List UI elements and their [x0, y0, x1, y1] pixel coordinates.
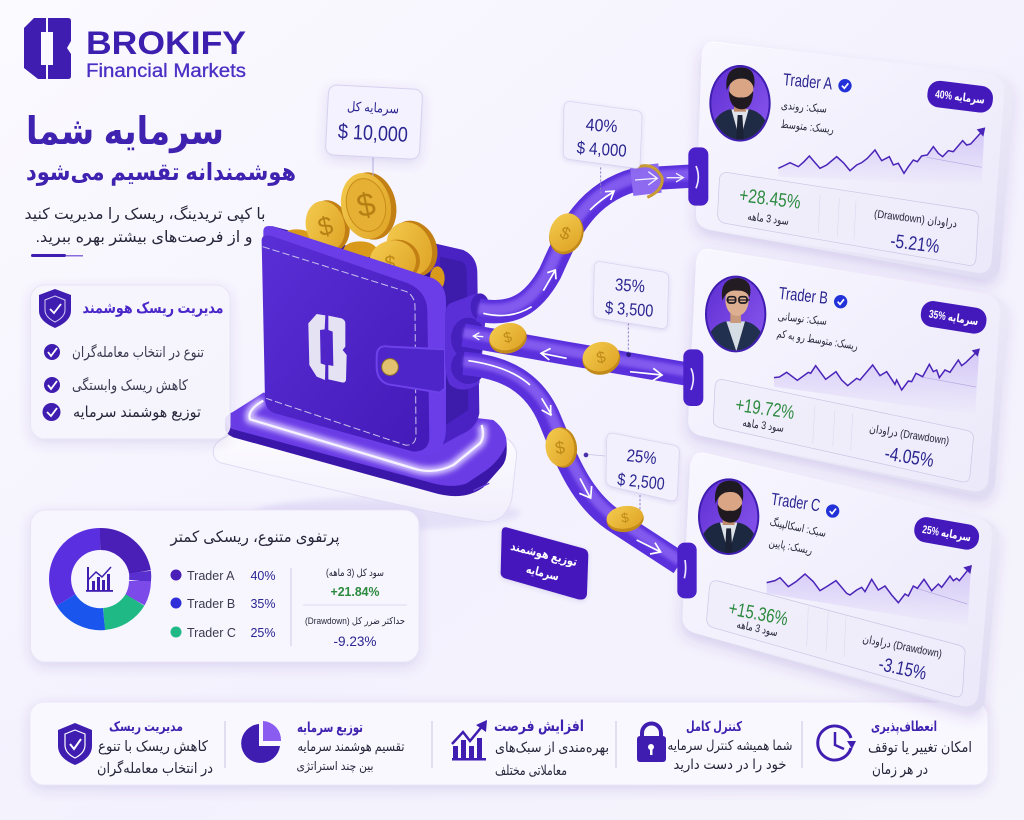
panel: Trader C card: [683, 453, 999, 711]
stats box: [707, 581, 965, 697]
coins on pipes: [486, 208, 645, 534]
clasp strap: [377, 346, 445, 393]
legend: Trader C: Trader C: [187, 626, 236, 640]
panel heading: پرتفوی متنوع، ریسکی کمتر: [170, 529, 340, 547]
list item: diversity: تنوع در انتخاب معامله‌گران: [72, 344, 204, 361]
feature: flexibility: [818, 719, 972, 778]
summary: total profit: [326, 568, 384, 599]
legend: Trader B: [170, 597, 276, 611]
allocation pill: [912, 515, 981, 552]
icon: clock: [818, 726, 856, 760]
donut chart: [60, 539, 140, 619]
icon: verified badge: [834, 295, 847, 308]
icon: verified badge: [838, 79, 852, 92]
callout: total capital: $ 10,000: [337, 120, 408, 147]
callout: 40% allocation: $ 4,000: [576, 137, 627, 161]
legend: Trader A: [170, 569, 276, 583]
profit value: +19.72%: [734, 395, 796, 424]
trader style: سبک: روندی: [781, 100, 827, 116]
profit label: سود 3 ماهه: [747, 211, 790, 228]
avatar: Trader C: [697, 478, 760, 555]
feature: capital allocation: توزیع سرمایه: [297, 719, 363, 736]
legend: Trader B: 35%: [250, 597, 276, 611]
feature: capital allocation: بین چند استراتژی: [296, 759, 374, 774]
trader risk: ریسک: متوسط: [780, 119, 834, 136]
logo tagline: Financial Markets: [86, 61, 246, 82]
callout: 25% allocation: [583, 433, 679, 510]
trader risk: ریسک: متوسط رو به کم: [776, 328, 859, 353]
icon: chart in donut: [86, 567, 113, 592]
accent line: [31, 254, 83, 257]
summary: max drawdown: -9.23%: [334, 633, 376, 649]
feature: capital allocation: تقسیم هوشمند سرمایه: [298, 739, 405, 755]
platform: [213, 393, 520, 530]
callout: 40% allocation: [563, 102, 642, 193]
allocation pill: سرمایه ‎25%: [921, 524, 972, 544]
feature: full control: [637, 719, 792, 773]
callout: 35% allocation: 35%: [614, 274, 646, 296]
panel: smart risk management: [30, 285, 230, 439]
drawdown value: -5.21%: [889, 231, 941, 258]
stats box: [713, 379, 973, 482]
feature: more opportunity: [452, 718, 609, 778]
allocation pill: سرمایه ‎35%: [928, 308, 979, 328]
trader style: سبک: نوسانی: [777, 311, 827, 328]
line chart: [767, 565, 972, 627]
legend: Trader B: Trader B: [187, 597, 235, 611]
coins on pipes: $: [554, 437, 566, 458]
flow pipes: [445, 102, 708, 600]
icon: logo mark: [24, 18, 71, 79]
legend: Trader A: 40%: [250, 569, 276, 583]
list item: lower risk: کاهش ریسک وابستگی: [72, 377, 188, 394]
wallet logo: [308, 314, 347, 383]
coins in wallet: $: [384, 253, 396, 275]
connector block: [445, 293, 489, 390]
trader name: Trader B: [778, 283, 829, 308]
allocation pill: [919, 299, 988, 335]
callout: 35% allocation: $ 3,500: [604, 297, 654, 321]
panel: portfolio: [30, 510, 419, 662]
wallet on platform: [213, 167, 520, 530]
trader name: Trader C: [770, 489, 822, 515]
feature: risk management: [58, 719, 213, 777]
panel: bottom feature bar: [30, 702, 988, 785]
intro text: [24, 205, 266, 247]
legend: Trader C: 25%: [250, 626, 276, 640]
feature: full control: شما همیشه کنترل سرمایه: [668, 738, 792, 754]
coins in wallet: $: [353, 185, 379, 224]
feature: risk management: مدیریت ریسک: [109, 719, 183, 734]
profit label: سود 3 ماهه: [736, 619, 779, 639]
inner opening: [272, 226, 445, 317]
logo name: BROKIFY: [86, 25, 246, 61]
feature: risk management: در انتخاب معامله‌گران: [97, 760, 213, 777]
drawdown label: دراودان (Drawdown): [873, 208, 958, 230]
tab connectors: [677, 147, 708, 598]
wallet back panel: [420, 240, 479, 453]
coins on pipes: $: [502, 330, 514, 347]
avatar: Trader A: [708, 65, 772, 142]
profit value: +15.36%: [727, 598, 790, 631]
coins in wallet: [282, 167, 446, 290]
legend: Trader C: [170, 626, 276, 640]
coins on pipes: $: [620, 510, 630, 526]
trader risk: ریسک: پایین: [768, 537, 813, 557]
title: سرمایه شما: [26, 111, 224, 153]
profit value: +28.45%: [738, 185, 802, 214]
drawdown label: دراودان (Drawdown): [868, 423, 950, 448]
avatar: Trader B: [704, 276, 767, 352]
callout: 40% allocation: 40%: [585, 114, 618, 136]
summary: max drawdown: [305, 616, 405, 649]
feature: more opportunity: افزایش فرصت: [494, 718, 584, 735]
icon: verified badge: [826, 504, 839, 518]
drawdown value: -3.15%: [877, 654, 928, 685]
feature: full control: کنترل کامل: [686, 719, 742, 734]
callout: 35% allocation: [593, 262, 669, 357]
list item: diversity: [44, 344, 204, 361]
intro text: با کپی تریدینگ، ریسک را مدیریت کنید: [24, 205, 266, 224]
drawdown value: -4.05%: [883, 444, 935, 472]
pipe: top to Trader A: [478, 166, 693, 316]
icon: pie chart: [241, 721, 281, 763]
summary: total profit: +21.84%: [330, 584, 380, 599]
trader style: سبک: اسکالپینگ: [769, 515, 827, 540]
panel: Trader B card: [688, 249, 1008, 496]
callout: total capital: [325, 85, 423, 176]
list item: smart allocation: توزیع هوشمند سرمایه: [73, 404, 201, 421]
drawdown label: دراودان (Drawdown): [861, 633, 943, 661]
icon: padlock: [637, 724, 666, 762]
pipe: bottom to Trader C: [463, 361, 680, 563]
line chart: [774, 348, 980, 415]
trader name: Trader A: [782, 69, 833, 93]
feature: more opportunity: معاملاتی مختلف: [495, 762, 567, 778]
legend: Trader A: Trader A: [187, 569, 235, 583]
feature: flexibility: در هر زمان: [872, 762, 928, 778]
allocation pill: [926, 79, 994, 114]
allocation pill: سرمایه ‎40%: [934, 89, 985, 107]
feature: flexibility: امکان تغییر یا توقف: [868, 740, 972, 756]
stats box: [718, 173, 978, 266]
pipe: middle to Trader B: [463, 333, 687, 381]
subtitle: هوشمندانه تقسیم می‌شود: [26, 159, 296, 186]
coins on pipes: $: [557, 222, 574, 244]
coins in wallet: $: [315, 210, 337, 242]
icon: shield: [58, 723, 92, 765]
callout: smart distribution: سرمایه: [525, 562, 561, 583]
feature: flexibility: انعطاف‌پذیری: [871, 719, 937, 734]
feature: capital allocation: [241, 719, 405, 774]
callout: total capital: سرمایه کل: [347, 99, 399, 117]
feature: more opportunity: بهره‌مندی از سبک‌های: [495, 739, 609, 756]
callout: smart distribution: توزیع هوشمند: [509, 539, 579, 570]
summary: total profit: سود کل (3 ماهه): [326, 568, 384, 579]
callout: 25% allocation: $ 2,500: [616, 469, 666, 494]
icon: shield: [39, 289, 71, 328]
profit label: سود 3 ماهه: [742, 417, 785, 435]
callout: 25% allocation: 25%: [626, 445, 658, 468]
list item: lower risk: [44, 377, 188, 394]
feature: full control: خود را در دست دارید: [674, 756, 786, 773]
feature: risk management: کاهش ریسک با تنوع: [98, 739, 208, 755]
logo: Brokify: [24, 18, 246, 82]
intro text: و از فرصت‌های بیشتر بهره ببرید.: [36, 229, 253, 247]
panel heading: مدیریت ریسک هوشمند: [82, 300, 224, 317]
icon: growth chart: [452, 720, 487, 760]
panel: Trader A card: [696, 42, 1013, 279]
wallet front: [262, 226, 446, 455]
coins on pipes: $: [595, 349, 607, 367]
summary: max drawdown: حداکثر ضرر کل (Drawdown): [305, 616, 405, 627]
callout: smart distribution: [501, 527, 588, 600]
line chart: [778, 127, 985, 187]
